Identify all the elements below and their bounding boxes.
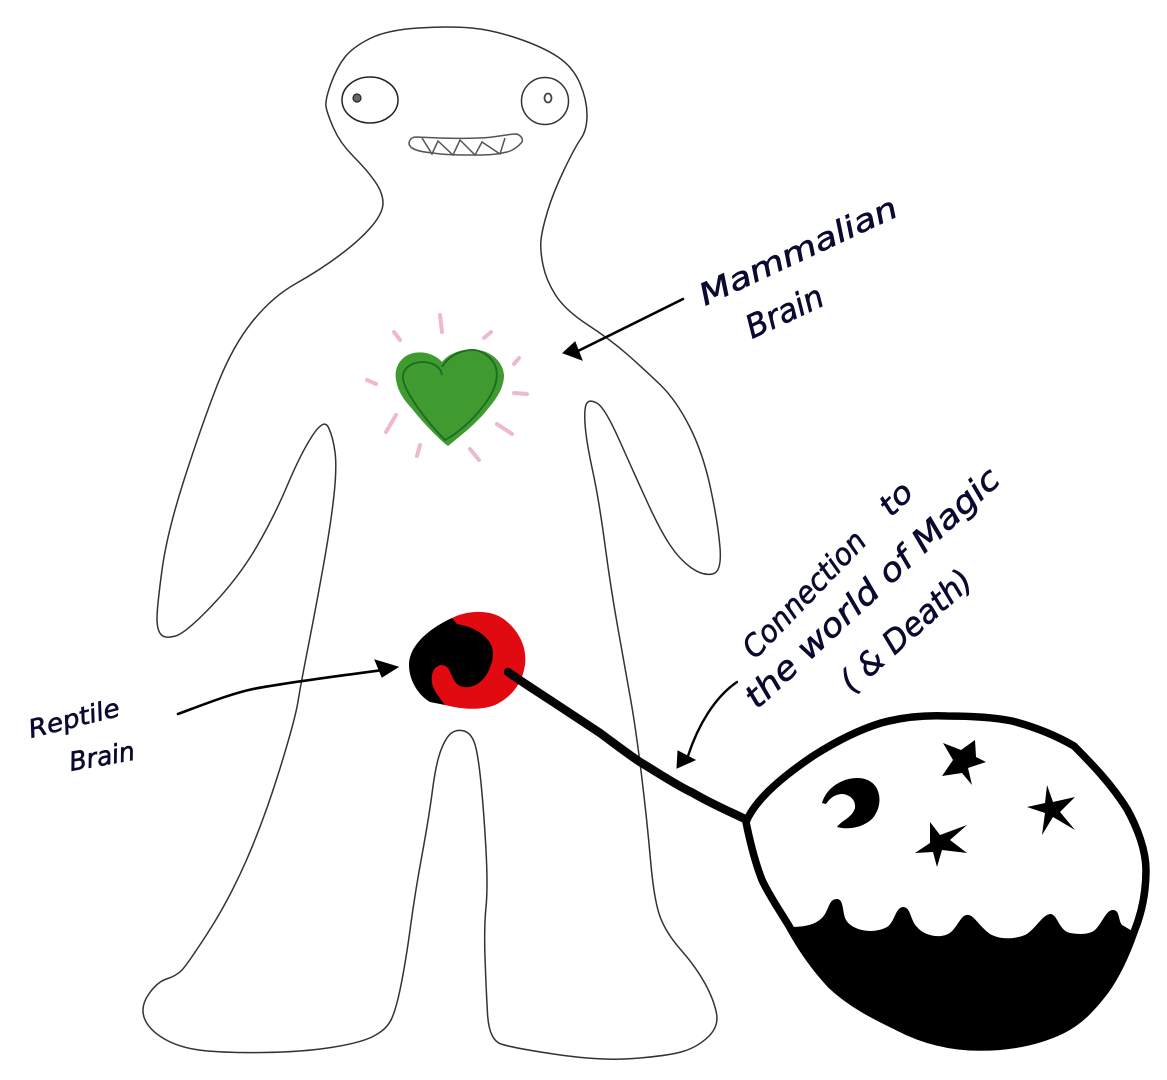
icon: crescent moon <box>822 778 879 828</box>
heart inner line <box>403 350 497 440</box>
label: Connection to the world of Magic (& Death): the world of Magic <box>737 459 1008 716</box>
label: Reptile Brain: Brain <box>67 737 137 778</box>
icon: left eye <box>342 77 398 123</box>
icon: green heart with rays <box>367 315 527 460</box>
pink rays <box>367 315 527 460</box>
label: Connection to the world of Magic (& Death): Connection <box>736 524 874 666</box>
label: Mammalian Brain: Mammalian <box>694 191 903 313</box>
icon: toothy mouth <box>409 134 522 155</box>
arrow: to reptile brain <box>178 660 398 714</box>
figure: body outline <box>143 27 720 1059</box>
label: Connection to the world of Magic (& Death): ( & Death) <box>832 561 980 700</box>
label: Reptile Brain <box>25 693 137 778</box>
arrow: to connection cord <box>677 682 737 768</box>
icon: red and black swirl <box>409 612 525 709</box>
icon: right eye <box>522 78 568 124</box>
connector cord to magic world <box>508 672 743 818</box>
black sea <box>789 899 1134 1047</box>
label: Connection to the world of Magic (& Death): to <box>872 475 921 524</box>
label: Mammalian Brain: Brain <box>739 277 830 346</box>
icon: stars <box>915 740 1075 867</box>
arrow: to mammalian brain <box>563 299 683 360</box>
world outline <box>746 716 1146 1047</box>
magic world circle <box>746 716 1146 1047</box>
heart <box>396 350 504 446</box>
label: Mammalian Brain <box>694 191 903 346</box>
label: Reptile Brain: Reptile <box>25 693 123 744</box>
